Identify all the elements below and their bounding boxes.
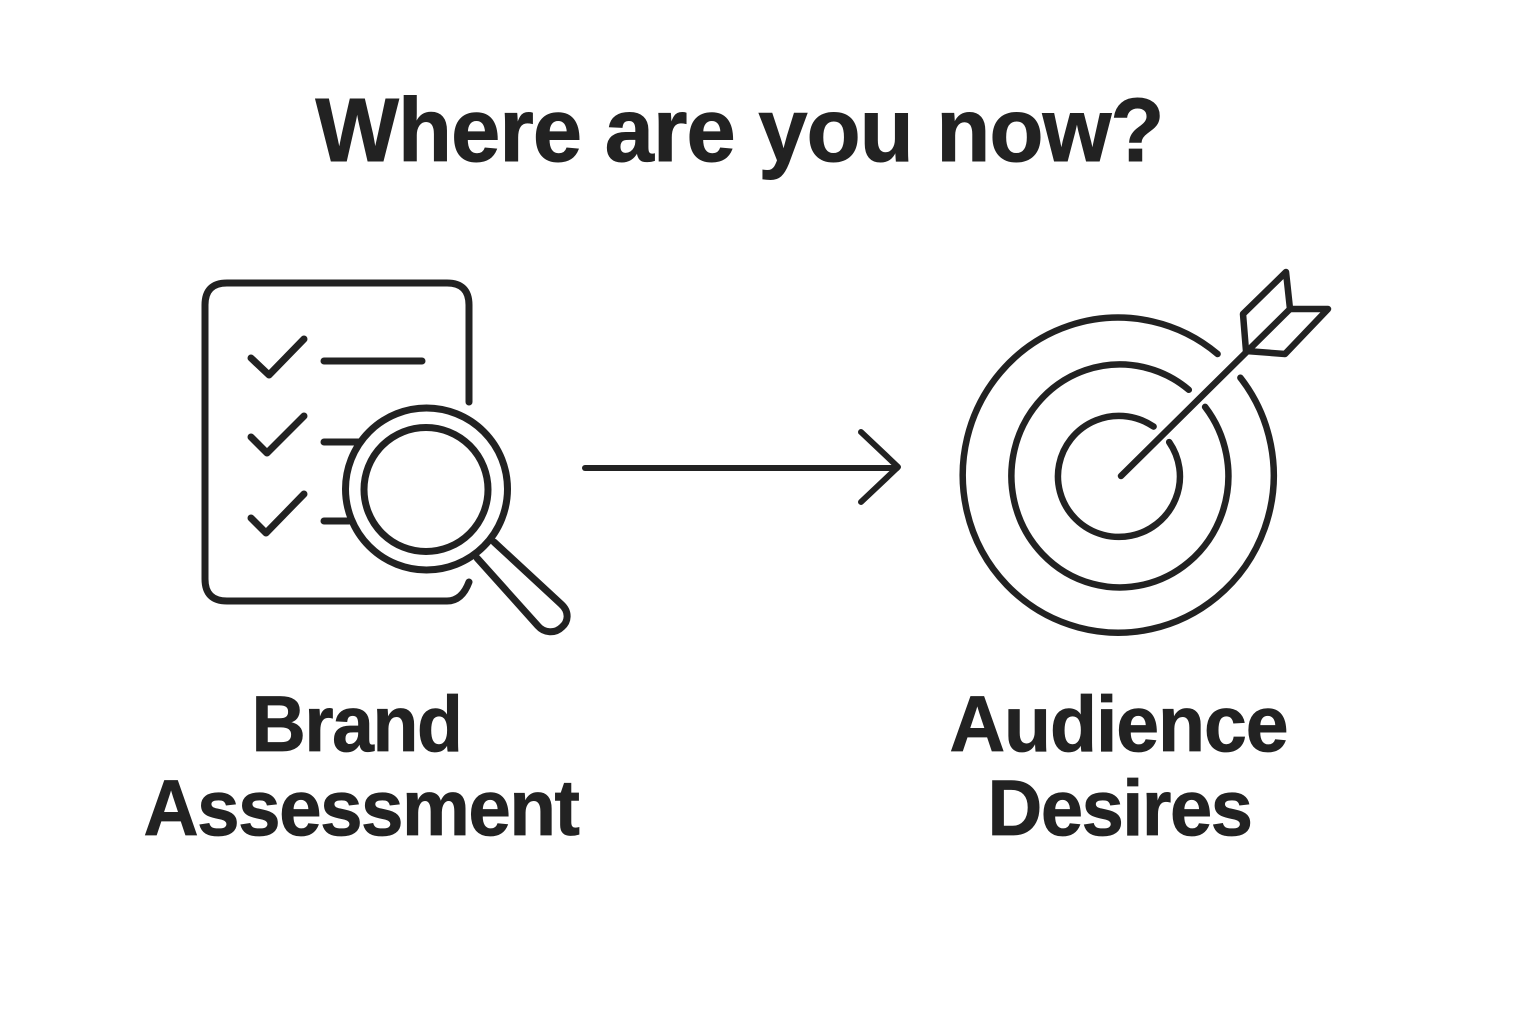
label: Brand Assessment: Brand bbox=[252, 679, 462, 768]
icon: target with arrow bbox=[963, 272, 1328, 633]
label: Brand Assessment bbox=[144, 679, 580, 852]
label: Audience Desires: Audience bbox=[950, 679, 1288, 768]
label: Brand Assessment: Assessment bbox=[144, 763, 580, 852]
label: Audience Desires: Desires bbox=[988, 763, 1252, 852]
arrow bbox=[585, 432, 898, 502]
title: Where are you now? bbox=[316, 81, 1164, 181]
label: Audience Desires bbox=[950, 679, 1288, 852]
icon: checklist with magnifying glass bbox=[205, 283, 567, 632]
